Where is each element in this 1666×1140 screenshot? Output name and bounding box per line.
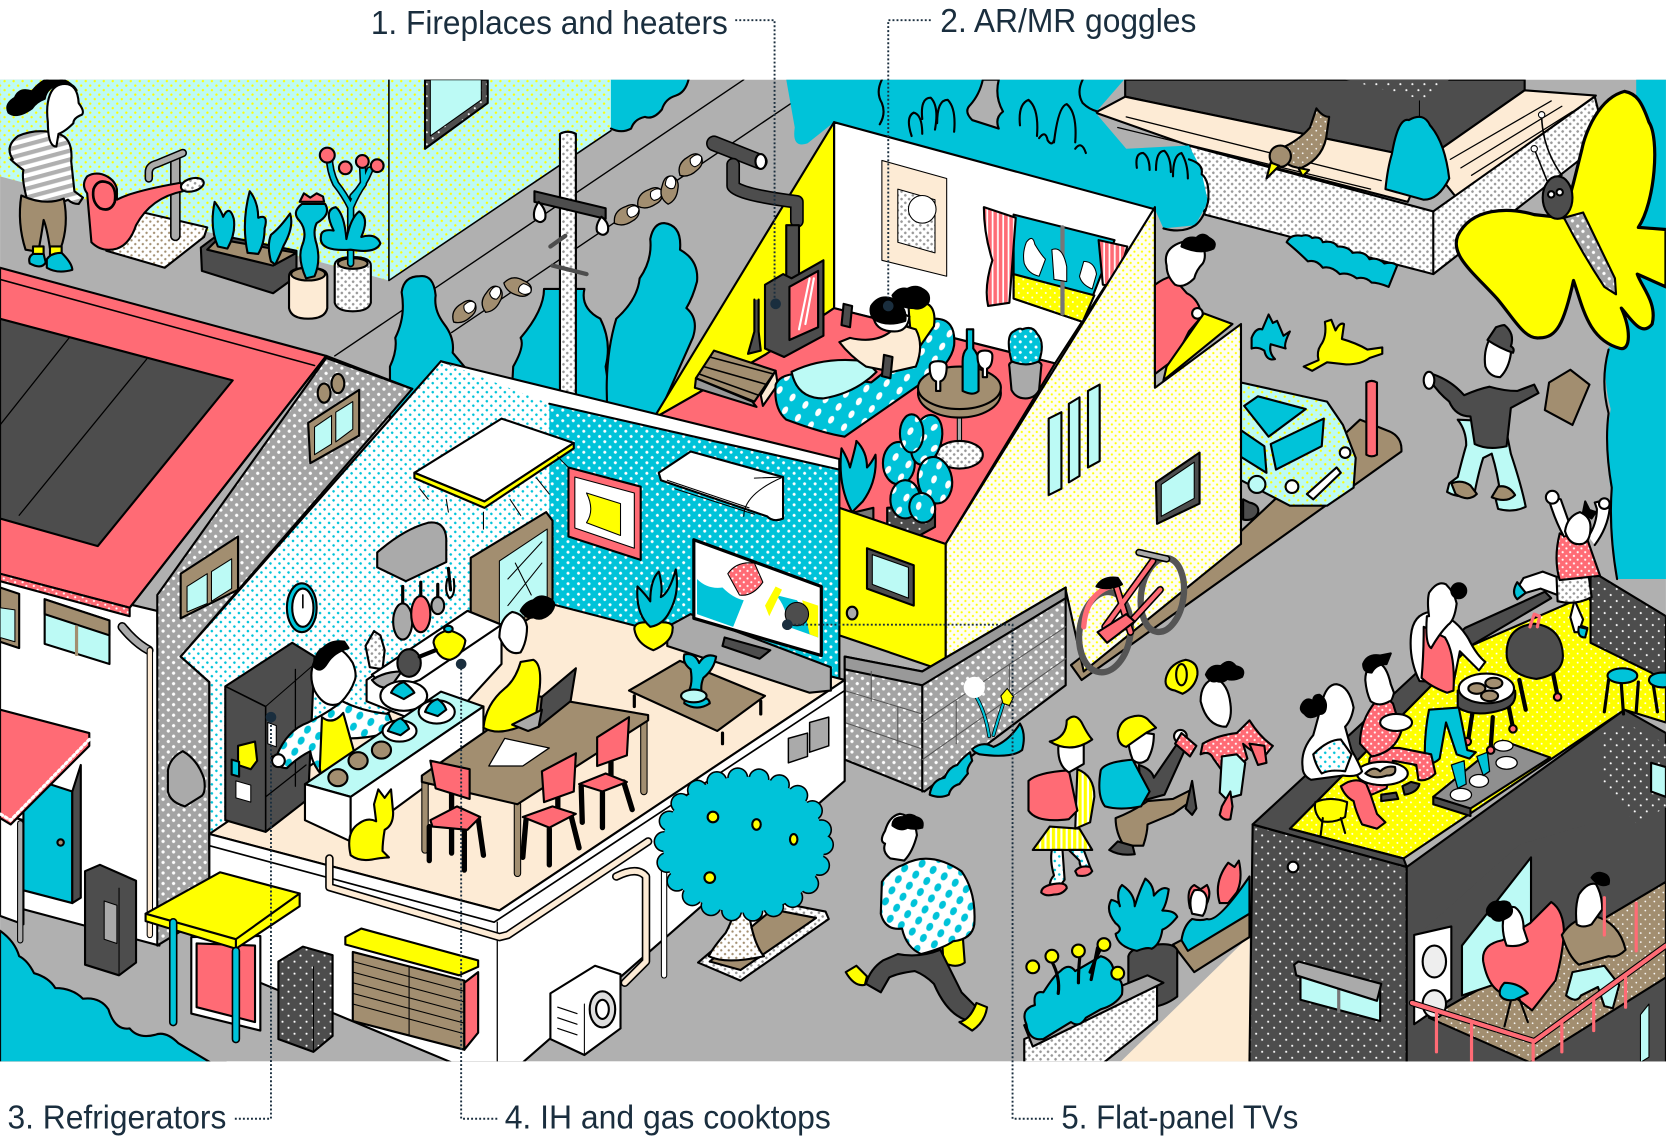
panel: mint building wall top left	[0, 80, 611, 280]
white planter with yellow buds	[1024, 938, 1163, 1062]
shelf with glass	[471, 512, 553, 637]
ceiling light	[414, 419, 574, 529]
woman at laptop in yellow	[483, 596, 576, 732]
panel: yellow rooftop	[1253, 571, 1666, 867]
panel: left house wall	[0, 574, 159, 946]
rabbit and frog	[1252, 314, 1382, 371]
bottom yellow awning and red door	[146, 872, 300, 1039]
firewood logs	[695, 351, 778, 407]
red dining chairs	[429, 717, 632, 870]
small window on dark building	[1294, 962, 1381, 1021]
dining table	[422, 696, 648, 873]
plant on floor	[634, 569, 677, 650]
side table with wine	[918, 329, 1001, 469]
wall clock	[287, 583, 317, 632]
back counter and cooktop (item 4)	[367, 611, 502, 722]
outdoor AC unit	[550, 966, 621, 1055]
rooftop person seated	[1301, 684, 1385, 835]
planter with tulips	[1173, 861, 1249, 972]
panel: dark building and decks top right	[1095, 80, 1598, 287]
dark dotted cabinet	[278, 947, 333, 1052]
framed picture	[568, 467, 641, 560]
icon: mint car	[1241, 381, 1377, 520]
meter box	[85, 865, 136, 975]
panel: grey gable side wall	[157, 358, 412, 946]
balcony with laundry and mint door	[1412, 824, 1666, 1062]
label 5: 5. Flat-panel TVs	[1061, 1098, 1298, 1135]
label 1: 1. Fireplaces and heaters	[371, 4, 728, 41]
window with curtains	[984, 207, 1127, 322]
planters with cyan plants	[201, 148, 384, 319]
panel: background cyan foliage top centre	[786, 80, 1208, 230]
red bicycle	[1074, 552, 1189, 676]
cyan leafy plants with pot	[1109, 879, 1177, 1007]
wooden blinds	[345, 929, 478, 1050]
coffee table and vase	[629, 654, 765, 744]
rooftop person grilling	[1410, 583, 1485, 767]
label 3: 3. Refrigerators	[7, 1098, 226, 1135]
utility pole with birds on wires	[448, 132, 706, 409]
man in hat with briefcase	[1424, 325, 1589, 511]
label 2: 2. AR/MR goggles	[940, 2, 1196, 39]
yellow front wall with window	[839, 508, 946, 671]
range hood	[377, 522, 446, 581]
cactus	[1009, 328, 1042, 398]
boy with raised arms top right	[1514, 491, 1610, 637]
cyan foliage behind street	[611, 80, 689, 131]
icon: wood stove and flue (item 1)	[714, 143, 823, 357]
yellow cat	[349, 789, 393, 860]
rooftop grill and kettle barbecue	[1458, 614, 1563, 754]
person watering plants	[7, 78, 83, 272]
walking boy with backpack	[846, 814, 987, 1031]
cyan bush bottom left	[0, 931, 226, 1075]
panel: dark building bottom right	[1249, 710, 1666, 1062]
person on balcony	[1155, 235, 1232, 380]
rooftop person with plates	[1357, 653, 1435, 801]
wall picture	[882, 160, 947, 276]
hanging pots and oven mitt	[366, 568, 454, 669]
panel: cream side wall of upper house	[946, 207, 1241, 671]
wall air conditioner	[659, 452, 783, 520]
brown driveway	[1071, 420, 1401, 680]
panel: white ground floor	[209, 680, 845, 1062]
cyan stools	[1604, 668, 1666, 714]
cyan strip right edge	[1604, 80, 1666, 579]
tree with yellow fruit	[663, 777, 829, 981]
label 4: 4. IH and gas cooktops	[505, 1098, 831, 1135]
small red porch and cyan door	[0, 710, 89, 940]
person at fridge with yellow apron	[272, 641, 427, 789]
street lines and wires	[335, 80, 792, 356]
panel: kitchen walls	[181, 361, 839, 850]
flat-panel TV and stand (item 5)	[667, 540, 831, 693]
boy with cyan backpack	[1099, 716, 1196, 855]
bird perched on wall	[1266, 108, 1329, 178]
balcony red railing	[1412, 898, 1666, 1062]
cyan cypress trees	[390, 223, 697, 425]
stone garden wall	[845, 588, 1066, 792]
girl waving yellow hat	[1166, 660, 1273, 820]
refrigerator (item 3)	[225, 643, 315, 832]
leader lines	[235, 20, 1053, 1119]
kitchen island	[305, 692, 483, 841]
woman on sofa wearing AR goggles (item 2)	[775, 287, 954, 437]
windows on left house	[0, 588, 150, 935]
panel: kitchen floor	[209, 603, 845, 911]
panel: upper house room with red floor	[653, 122, 1155, 544]
person with patterned top on balcony	[1562, 873, 1626, 1008]
dandelion weed	[930, 677, 1024, 797]
girl with red backpack	[1028, 717, 1094, 895]
panel: red roof with solar panels	[0, 268, 412, 616]
giant yellow butterfly	[1456, 91, 1666, 349]
icon: red watering can and faucet	[84, 153, 207, 268]
woman in red dress on balcony	[1483, 901, 1564, 1026]
cream pavement strip	[1120, 936, 1249, 1062]
potted plants on red floor	[841, 411, 956, 539]
